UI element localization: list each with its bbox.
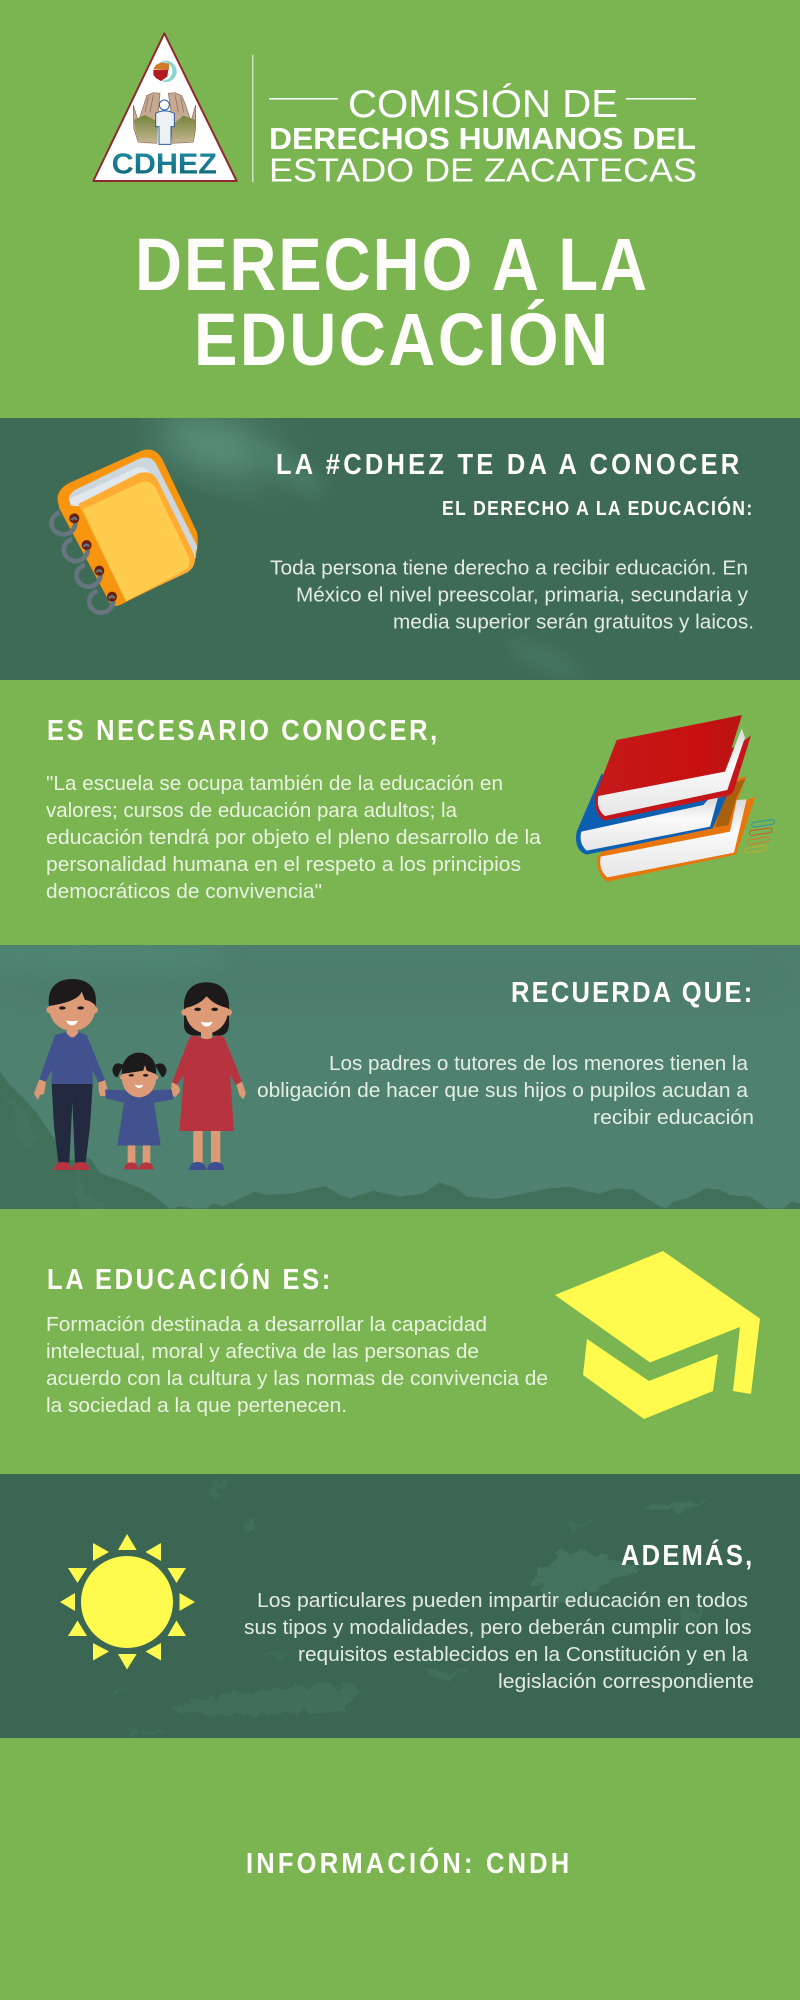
title: DERECHO A LA bbox=[135, 223, 647, 306]
panel: footer bbox=[0, 1738, 800, 2000]
icon: paperclips bbox=[744, 819, 775, 853]
text block: democráticos de convivencia" bbox=[46, 881, 322, 903]
heading: LA EDUCACIÓN ES: bbox=[47, 1262, 330, 1295]
text block: personalidad humana en el respeto a los principios bbox=[46, 854, 521, 876]
icon: graduation cap bbox=[555, 1251, 760, 1419]
text block: media superior serán gratuitos y laicos. bbox=[393, 612, 754, 634]
mother bbox=[171, 982, 246, 1170]
icon: sun bbox=[60, 1534, 195, 1670]
text block: valores; cursos de educación para adultos; la bbox=[46, 800, 458, 822]
child bbox=[99, 1053, 180, 1169]
mountains bbox=[0, 1072, 800, 1210]
text block: Los particulares pueden impartir educación en todos bbox=[257, 1590, 748, 1612]
text block bbox=[46, 1314, 548, 1417]
text block bbox=[257, 1053, 754, 1129]
panel: la educación es bbox=[0, 1209, 800, 1474]
icon: stack of books bbox=[576, 715, 775, 882]
text block: educación tendrá por objeto el pleno desarrollo de la bbox=[46, 827, 542, 849]
text block bbox=[244, 1590, 754, 1693]
panel: la #CDHEZ te da a conocer bbox=[0, 404, 800, 686]
text block: la sociedad a la que pertenecen. bbox=[46, 1395, 347, 1417]
organisation name: COMISIÓN DE bbox=[348, 83, 618, 126]
panel: recuerda que bbox=[0, 944, 800, 1210]
icon: orange book bbox=[597, 776, 755, 882]
illustration: family bbox=[34, 979, 246, 1170]
text block: recibir educación bbox=[593, 1107, 754, 1129]
icon: blue book bbox=[576, 773, 727, 855]
heading: RECUERDA QUE: bbox=[511, 975, 752, 1008]
text block bbox=[270, 558, 754, 634]
father bbox=[34, 979, 108, 1170]
icon: red book bbox=[595, 715, 751, 821]
icon: notebook bbox=[52, 449, 198, 613]
text block bbox=[46, 773, 542, 903]
organisation name: DERECHOS HUMANOS DEL bbox=[269, 121, 696, 156]
title bbox=[135, 223, 647, 381]
subheading: EL DERECHO A LA EDUCACIÓN: bbox=[442, 497, 752, 519]
text block: Formación destinada a desarrollar la capacidad bbox=[46, 1314, 487, 1336]
text block: México el nivel preescolar, primaria, secundaria y bbox=[296, 584, 748, 606]
organisation name bbox=[269, 83, 697, 190]
source credit: INFORMACIÓN: CNDH bbox=[246, 1846, 569, 1879]
panel: es necesario conocer bbox=[0, 680, 800, 945]
heading: ES NECESARIO CONOCER, bbox=[47, 713, 437, 746]
text block: acuerdo con la cultura y las normas de convivencia de bbox=[46, 1368, 548, 1390]
text block: intelectual, moral y afectiva de las personas de bbox=[46, 1341, 479, 1363]
logo: CDHEZ triangle bbox=[93, 33, 237, 181]
title: EDUCACIÓN bbox=[194, 298, 608, 381]
text block: requisitos establecidos en la Constitución y en la bbox=[298, 1644, 749, 1666]
heading: LA #CDHEZ TE DA A CONOCER bbox=[276, 447, 739, 480]
text block: Toda persona tiene derecho a recibir educación. En bbox=[270, 558, 748, 580]
heading: ADEMÁS, bbox=[621, 1538, 752, 1571]
panel: además bbox=[0, 1474, 800, 1738]
text block: Los padres o tutores de los menores tienen la bbox=[329, 1053, 749, 1075]
text block: obligación de hacer que sus hijos o pupilos acudan a bbox=[257, 1080, 749, 1102]
text block: sus tipos y modalidades, pero deberán cumplir con los bbox=[244, 1617, 752, 1639]
logo: CDHEZ triangle: CDHEZ bbox=[112, 148, 217, 180]
organisation name: ESTADO DE ZACATECAS bbox=[269, 152, 697, 190]
text block: "La escuela se ocupa también de la educación en bbox=[46, 773, 503, 795]
panel: header bbox=[0, 0, 800, 418]
text block: legislación correspondiente bbox=[498, 1671, 754, 1693]
divider line bbox=[252, 55, 254, 182]
